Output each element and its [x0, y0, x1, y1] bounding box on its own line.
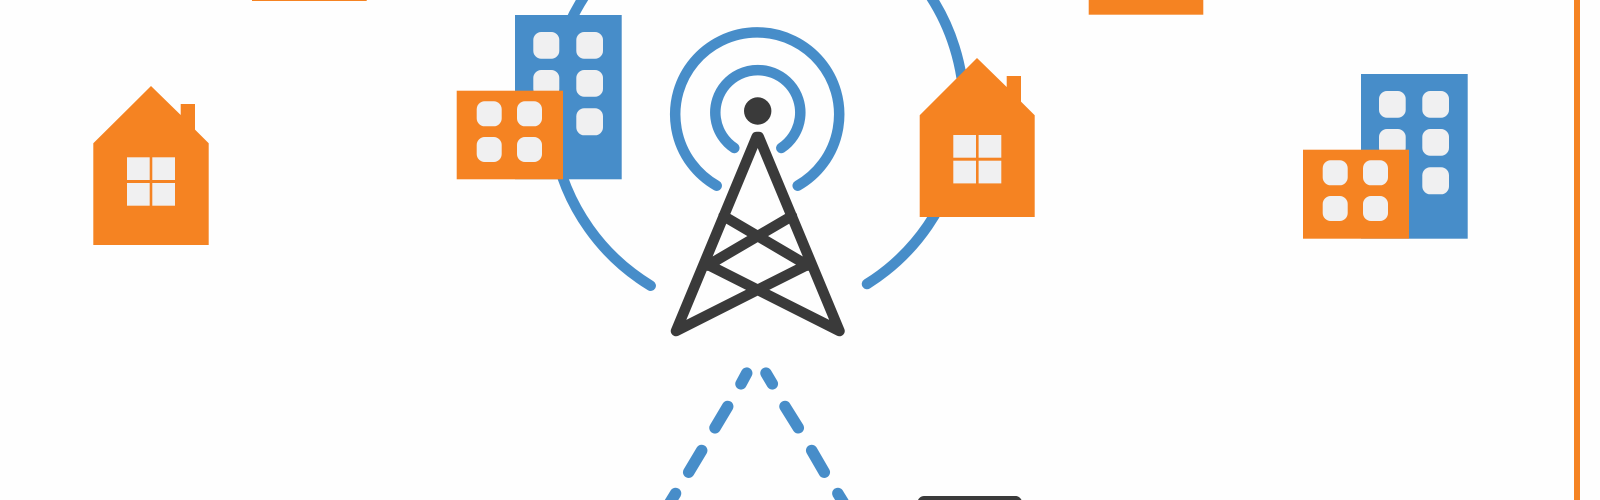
top-left orange bar	[252, 0, 367, 1]
top-right orange bar	[1089, 0, 1203, 15]
icon: office buildings left	[457, 15, 622, 179]
right orange vertical line	[1574, 0, 1580, 500]
outer signal arc	[675, 32, 839, 186]
icon: house left	[93, 86, 209, 245]
icon: office buildings right	[1303, 74, 1468, 239]
antenna dot	[744, 97, 771, 125]
icon: house right	[920, 58, 1035, 217]
dashed signal lines	[665, 373, 849, 500]
dark device top edge	[918, 496, 1022, 500]
tower frame	[676, 137, 840, 331]
large coverage arc	[551, 0, 964, 286]
inner signal arc	[715, 70, 800, 148]
icon: radio tower	[675, 32, 840, 331]
